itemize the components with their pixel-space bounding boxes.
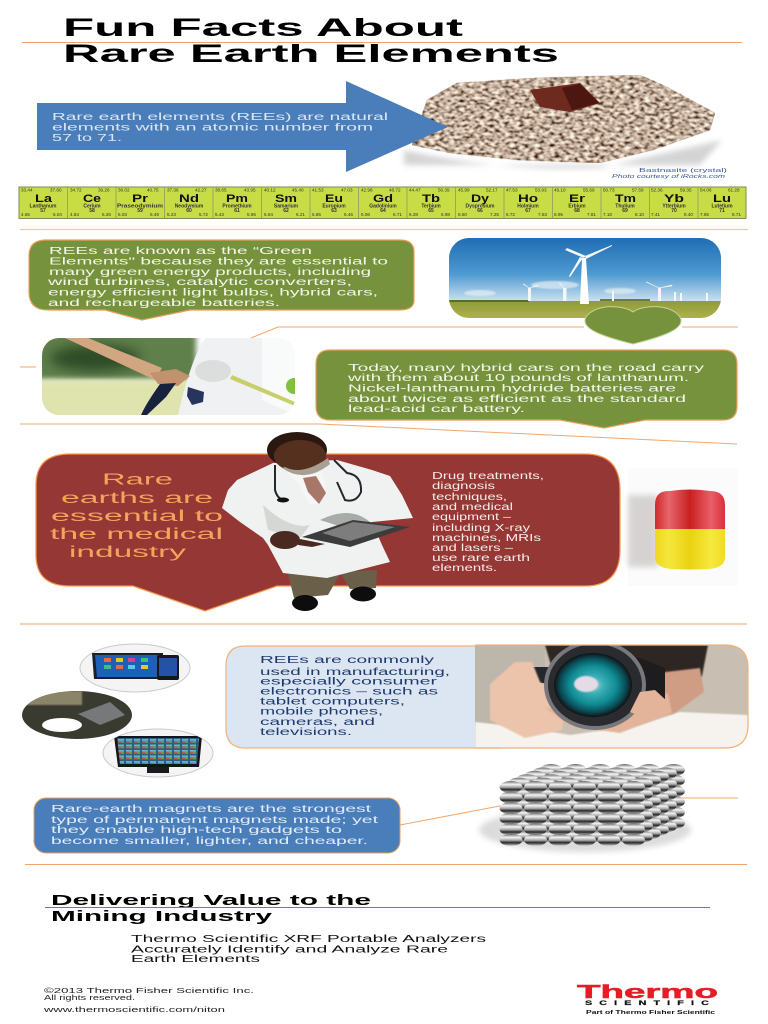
arrow with intro text	[37, 81, 448, 172]
periodic table strip: Ho	[518, 193, 538, 205]
periodic table strip: 66	[477, 208, 483, 214]
heading: delivering value: Delivering Value to the	[51, 893, 371, 909]
periodic table strip: 69	[622, 208, 628, 214]
consumer electronics text: televisions.	[260, 727, 352, 738]
medical heading: the medical	[50, 526, 223, 543]
heading: delivering value	[51, 893, 371, 925]
illustration: magnet ball cube	[479, 764, 691, 852]
periodic table strip: 7.81	[587, 212, 596, 217]
photo caption	[612, 168, 727, 180]
consumer electronics text: used in manufacturing,	[260, 667, 450, 678]
medical heading: industry	[69, 544, 187, 561]
periodic table strip: 62	[283, 208, 289, 214]
periodic table strip: Yb	[664, 193, 684, 205]
periodic table strip: 8.40	[684, 212, 693, 217]
consumer electronics text: tablet computers,	[260, 696, 405, 708]
periodic table strip: 5.26	[102, 212, 111, 217]
periodic table strip: Er	[569, 193, 586, 205]
periodic table strip: 5.85	[312, 212, 321, 217]
photo: electric car charging	[42, 338, 295, 415]
periodic table strip: 6.50	[458, 212, 467, 217]
periodic table strip: 5.23	[167, 212, 176, 217]
hybrid cars text: Today, many hybrid cars on the road carry	[348, 363, 704, 374]
periodic table strip: Dy	[471, 193, 490, 205]
periodic table strip: 42.27	[195, 188, 207, 192]
periodic table strip: Pr	[132, 193, 149, 205]
footer copyright	[42, 987, 254, 1014]
icon: pill	[628, 468, 738, 586]
periodic table strip: 55.69	[583, 188, 595, 192]
periodic table strip: 39.26	[98, 188, 110, 192]
periodic table strip: 7.25	[490, 212, 499, 217]
intro text: Rare earth elements (REEs) are natural	[52, 112, 388, 123]
periodic table strip: Sm	[275, 193, 297, 205]
periodic table strip: 33.44	[21, 188, 33, 192]
periodic table strip: 58	[89, 208, 95, 214]
periodic table strip: 7.65	[700, 212, 709, 217]
periodic table strip: 5.03	[118, 212, 127, 217]
periodic table strip: 38.65	[215, 188, 227, 192]
icon: tablet and phone	[80, 644, 190, 692]
connector lines	[20, 327, 738, 444]
logo: Thermo Scientific: Part of Thermo Fisher Scientific	[586, 1010, 715, 1016]
photo caption: Bastnasite (crystal)	[639, 168, 727, 174]
periodic table strip: 5.96	[247, 212, 256, 217]
periodic table strip: 4.84	[70, 212, 79, 217]
periodic table strip: 44.47	[409, 188, 421, 192]
periodic table strip: 47.03	[341, 188, 353, 192]
periodic table strip: Pm	[226, 193, 248, 205]
periodic table strip: 52.17	[486, 188, 498, 192]
icon: circuit board	[22, 691, 132, 739]
periodic table strip: 6.95	[554, 212, 563, 217]
periodic table strip: 34.72	[70, 188, 82, 192]
periodic table strip: 7.41	[651, 212, 660, 217]
periodic table strip: 42.98	[361, 188, 373, 192]
magnets text: they enable high-tech gadgets to	[51, 825, 343, 836]
analyzers text: Thermo Scientific XRF Portable Analyzers	[131, 934, 486, 945]
periodic table strip: 7.18	[603, 212, 612, 217]
illustration: doctor	[222, 432, 413, 611]
analyzers text: Accurately Identify and Analyze Rare	[131, 944, 449, 956]
periodic table strip: Lu	[713, 193, 731, 205]
green elements text: wind turbines, catalytic converters,	[46, 277, 352, 288]
periodic table strip: 5.43	[215, 212, 224, 217]
consumer electronics text: REEs are commonly	[260, 655, 434, 666]
magnets text: type of permanent magnets made; yet	[51, 815, 379, 826]
photo: bastnasite crystal rock	[404, 75, 722, 169]
medical body text: use rare earth	[432, 553, 530, 564]
logo: Thermo Scientific: SCIENTIFIC	[585, 1001, 716, 1007]
periodic table strip: Dysprosium	[466, 204, 495, 210]
footer copyright: All rights reserved.	[44, 995, 135, 1002]
connector lines	[400, 798, 738, 825]
consumer electronics text: especially consumer	[260, 676, 438, 688]
periodic table strip: 5.64	[264, 212, 273, 217]
periodic table strip: 63	[331, 208, 337, 214]
periodic table strip: Lutetium	[711, 204, 733, 210]
periodic table strip: 48.72	[389, 188, 401, 192]
title: Fun Facts About	[63, 14, 464, 42]
periodic table strip: 57.58	[632, 188, 644, 192]
periodic table strip: 65	[428, 208, 434, 214]
periodic table strip: 45.99	[458, 188, 470, 192]
periodic table strip: 5.04	[53, 212, 62, 217]
heading: delivering value: Mining Industry	[51, 909, 272, 925]
periodic table strip: 5.49	[150, 212, 159, 217]
periodic table strip: Neodymium	[175, 204, 204, 210]
periodic table strip: Promethium	[222, 204, 252, 210]
intro text: elements with an atomic number from	[52, 122, 373, 134]
medical body text: Drug treatments,	[432, 471, 544, 482]
logo: Thermo Scientific: Thermo	[577, 982, 718, 1002]
periodic table strip: 6.46	[344, 212, 353, 217]
hybrid cars text: Nickel-lanthanum hydride batteries are	[348, 384, 677, 394]
periodic table strip: 6.71	[393, 212, 402, 217]
icon group: electronics devices	[22, 644, 213, 777]
periodic table strip: 49.10	[554, 188, 566, 192]
hybrid cars text: about twice as efficient as the standard	[348, 394, 686, 405]
periodic table strip: 54.06	[700, 188, 712, 192]
icon: television	[103, 729, 213, 777]
periodic table strip: Ytterbium	[662, 204, 686, 210]
periodic table strip: Europium	[322, 204, 346, 210]
medical body text: elements.	[432, 563, 497, 574]
periodic table strip: Samarium	[274, 204, 299, 210]
green elements text: many green energy products, including	[49, 267, 371, 278]
green elements text: energy efficient light bulbs, hybrid cars,	[48, 288, 378, 298]
periodic table strip	[19, 187, 746, 218]
consumer electronics text: electronics – such as	[260, 686, 438, 698]
decorative heart	[585, 307, 681, 344]
logo: Thermo Scientific	[577, 982, 718, 1016]
title: Rare Earth Elements	[63, 40, 559, 68]
periodic table strip: 5.72	[199, 212, 208, 217]
periodic table strip: 8.10	[635, 212, 644, 217]
panel: hybrid cars callout	[316, 350, 737, 428]
periodic table strip: Tm	[615, 193, 636, 205]
panel: medical	[36, 454, 620, 611]
periodic table strip: 40.12	[264, 188, 276, 192]
photo caption: Photo courtesy of iRocks.com	[612, 174, 725, 180]
periodic table strip: 6.28	[409, 212, 418, 217]
green elements text: Elements" because they are essential to	[49, 256, 389, 268]
panel: magnets callout	[34, 798, 400, 853]
consumer electronics text: cameras, and	[260, 717, 375, 728]
periodic table strip: Cerium	[83, 204, 101, 210]
periodic table strip: La	[35, 193, 53, 205]
periodic table strip: 41.53	[312, 188, 324, 192]
medical body text: and lasers –	[432, 543, 514, 554]
medical heading: Rare	[102, 472, 173, 488]
medical body text: equipment –	[432, 512, 512, 523]
consumer electronics text: mobile phones,	[260, 706, 383, 718]
title	[63, 14, 559, 68]
periodic table strip: 7.53	[538, 212, 547, 217]
analyzers text	[131, 934, 486, 965]
intro text: 57 to 71.	[52, 133, 122, 144]
periodic table strip: 50.73	[603, 188, 615, 192]
medical body text: diagnosis	[432, 481, 495, 492]
magnets text: become smaller, lighter, and cheaper.	[51, 836, 368, 847]
periodic table strip: 4.65	[21, 212, 30, 217]
periodic table strip: 52.36	[651, 188, 663, 192]
hybrid cars text	[346, 363, 704, 415]
periodic table strip: Lanthanum	[30, 204, 57, 210]
periodic table strip: 40.75	[147, 188, 159, 192]
periodic table strip: 67	[525, 208, 531, 214]
green elements text: REEs are known as the “Green	[49, 246, 312, 257]
periodic table strip: 53.93	[535, 188, 547, 192]
periodic table strip: Praseodymium	[117, 204, 164, 210]
periodic table strip: Nd	[179, 193, 199, 205]
periodic table strip: 61	[234, 208, 240, 214]
hybrid cars text: lead-acid car battery.	[348, 404, 525, 415]
periodic table strip: 6.06	[361, 212, 370, 217]
footer copyright: www.thermoscientific.com/niton	[42, 1007, 225, 1014]
periodic table strip: Eu	[325, 193, 343, 205]
panel: consumer electronics callout	[226, 646, 500, 748]
periodic table strip: Thulium	[615, 204, 635, 210]
periodic table strip: Tb	[422, 193, 440, 205]
periodic table strip: 8.71	[732, 212, 741, 217]
periodic table strip: 6.98	[441, 212, 450, 217]
periodic table strip: 6.21	[296, 212, 305, 217]
medical body text: and medical	[432, 502, 513, 513]
panel: green elements callout	[29, 240, 414, 320]
periodic table strip: 59.35	[680, 188, 692, 192]
periodic table strip: Gadolinium	[369, 204, 397, 210]
medical body text: including X-ray	[432, 523, 530, 534]
periodic table strip: Ce	[83, 193, 101, 205]
periodic table strip: Erbium	[568, 204, 586, 210]
periodic table strip: 43.95	[244, 188, 256, 192]
periodic table strip: 68	[574, 208, 580, 214]
periodic table strip: 60	[186, 208, 192, 214]
periodic table strip: 37.80	[50, 188, 62, 192]
periodic table strip: Holmium	[517, 204, 539, 210]
medical body text	[432, 471, 544, 574]
periodic table strip: 71	[719, 208, 725, 214]
periodic table strip: 57	[40, 208, 46, 214]
green elements text	[46, 246, 389, 309]
periodic table strip: 64	[380, 208, 386, 214]
consumer electronics text	[260, 655, 450, 738]
periodic table strip: Terbium	[421, 204, 441, 210]
magnets text: Rare-earth magnets are the strongest	[51, 804, 372, 815]
analyzers text: Earth Elements	[131, 954, 260, 965]
photo: photographer with camera	[475, 640, 748, 748]
periodic table strip: 45.40	[292, 188, 304, 192]
periodic table strip: 70	[671, 208, 677, 214]
photo: wind turbines	[449, 238, 721, 318]
medical body text: techniques,	[432, 492, 507, 503]
periodic table strip: 61.28	[728, 188, 740, 192]
hybrid cars text: with them about 10 pounds of lanthanum.	[346, 373, 689, 384]
periodic table strip: 6.72	[506, 212, 515, 217]
green elements text: and rechargeable batteries.	[48, 298, 280, 309]
periodic table strip: 36.02	[118, 188, 130, 192]
magnets text	[51, 804, 379, 847]
periodic table strip: 59	[137, 208, 143, 214]
medical heading: essential to	[51, 508, 223, 525]
medical heading	[50, 472, 223, 561]
periodic table strip: 50.39	[438, 188, 450, 192]
intro text	[52, 112, 388, 144]
footer copyright: ©2013 Thermo Fisher Scientific Inc.	[44, 987, 254, 995]
medical heading: earths are	[61, 490, 213, 507]
periodic table strip: 37.36	[167, 188, 179, 192]
periodic table strip: 47.53	[506, 188, 518, 192]
medical body text: machines, MRIs	[432, 533, 541, 544]
periodic table strip: Gd	[373, 193, 393, 205]
